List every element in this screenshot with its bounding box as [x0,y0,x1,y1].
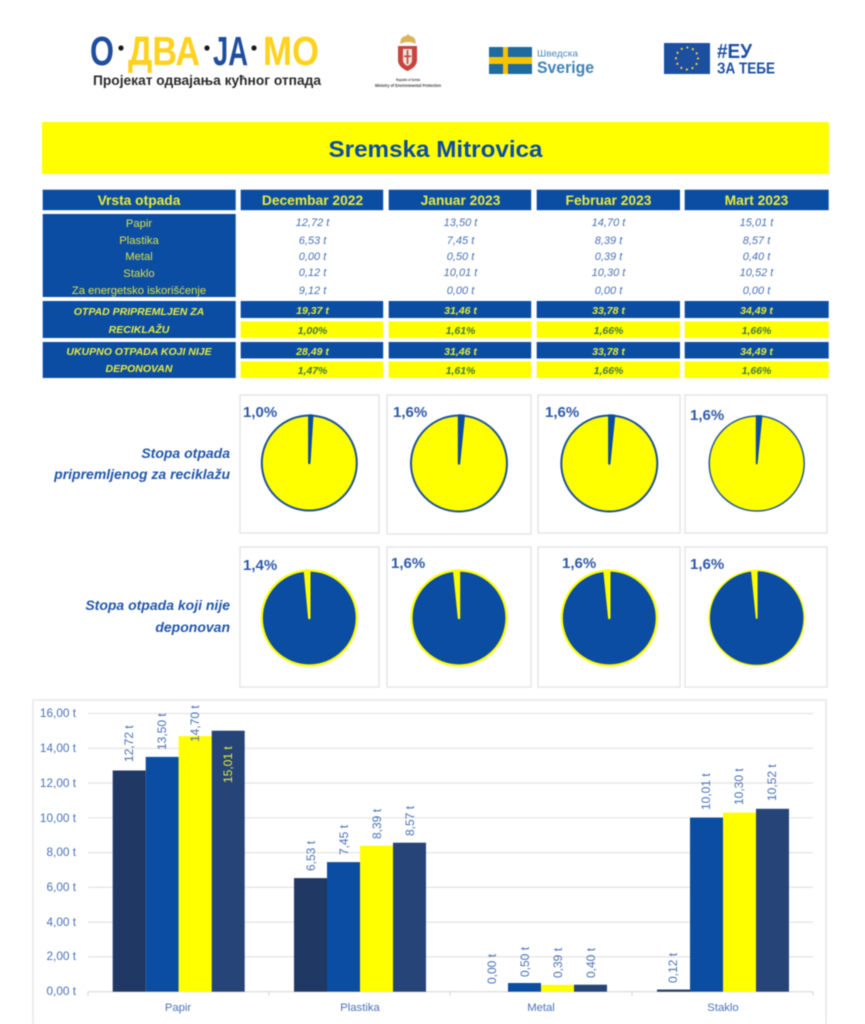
bars: Metal: 0,00 t [485,953,499,984]
table: January values: 0,50 t [447,251,475,263]
table: total non-landfilled waste row: 33,78 t [592,346,625,358]
table: waste type labels: Staklo [123,268,155,280]
pie card: non-landfilled February: 1,6% [562,555,596,572]
pie card: recycling rate March [685,395,827,533]
logo: Odvajamo project: Пројекат одвајања кућног отпада [93,72,321,88]
bars: Papir: 12,72 t [122,725,136,762]
y axis labels: 14,00 t [40,741,77,755]
table: total non-landfilled waste row [43,342,829,378]
table: total non-landfilled waste row: UKUPNO OTPADA KOJI NIJE [66,346,213,358]
y axis labels: 4,00 t [46,915,77,929]
table: total non-landfilled waste row: 1,66% [742,365,772,377]
table: total non-landfilled waste row: 1,66% [594,365,624,377]
table: February values: 8,39 t [595,235,623,247]
bars: Papir: 15,01 t [221,746,235,783]
bars: Metal: 0,40 t [584,947,598,978]
table: February values: 0,00 t [595,285,623,297]
pie card: recycling rate December: 1,0% [243,404,277,421]
table: total non-landfilled waste row: 1,61% [446,365,476,377]
bars: Plastika: 7,45 t [337,824,351,855]
bars: Plastika: 8,57 t [403,805,417,836]
bars: Staklo: 10,30 t [732,768,746,805]
table: February values: 10,30 t [592,267,626,279]
logo: Odvajamo project [90,28,321,88]
logo: EU for you: #ЕУ [717,41,753,63]
bars: Staklo: 10,52 t [765,764,779,801]
category labels: Staklo [707,1002,739,1014]
bars: Metal: 0,39 t [551,947,565,978]
category labels [165,1002,739,1014]
bars: Metal [485,946,607,992]
table: waste prepared for recycling row: RECIKLAŽU [109,323,170,336]
pie card: non-landfilled March [685,547,827,687]
logo: Sweden: Sverige [537,58,594,77]
table: waste prepared for recycling row: 1,66% [742,325,772,337]
logo: Sweden: Шведска [537,48,579,60]
table header: Vrsta otpada [98,193,181,208]
logo: Sweden [489,47,594,77]
table: waste type labels: Plastika [119,235,159,247]
bars: Staklo [657,764,789,992]
table: waste prepared for recycling row: OTPAD PRIPREMLJEN ZA [74,306,204,318]
table: January values: 10,01 t [444,267,478,279]
bars: Staklo: 0,12 t [666,952,680,983]
table: total non-landfilled waste row: 34,49 t [740,346,773,358]
table: January values [444,217,478,297]
table: December values: 12,72 t [296,217,330,229]
bars: Papir: 13,50 t [155,713,169,750]
y axis labels: 0,00 t [46,984,77,998]
table: waste prepared for recycling row: 1,66% [594,325,624,337]
table: waste prepared for recycling row: 34,49 t [740,305,773,317]
bars: Plastika [294,805,426,992]
pie card: non-landfilled December: 1,4% [243,557,277,574]
table: waste prepared for recycling row: 31,46 t [444,305,477,317]
logo: Republic of Serbia crest: Ministry of Environmental Protection [375,83,441,88]
table: March values: 10,52 t [740,267,774,279]
row heading: recycling rate: pripremljenog za reciklažu [53,466,230,482]
table: December values: 6,53 t [299,235,327,247]
y axis labels: 8,00 t [46,845,77,859]
table: waste prepared for recycling row [43,301,829,338]
y axis labels [40,706,77,998]
table: January values: 7,45 t [447,235,475,247]
row heading: recycling rate: Stopa otpada [141,445,230,461]
table header: Mart 2023 [725,193,789,208]
pie card: non-landfilled December [240,547,379,687]
pie card: recycling rate January [387,395,531,534]
row heading: recycling rate [53,445,230,482]
category labels: Metal [527,1002,555,1014]
row heading: non-landfilled rate: Stopa otpada koji nije [85,597,230,613]
table header [43,190,829,210]
table: waste type labels: Metal [125,251,153,263]
bars: Metal: 0,50 t [518,946,532,977]
category labels: Plastika [340,1002,380,1014]
pie card: recycling rate February: 1,6% [545,404,579,421]
pie card: non-landfilled March: 1,6% [690,556,724,573]
table: March values: 0,40 t [743,251,771,263]
table header: Januar 2023 [421,193,501,208]
logo: Odvajamo project: МО [263,28,319,74]
y axis labels: 12,00 t [40,776,77,790]
table: January values: 0,00 t [447,285,475,297]
y axis labels: 10,00 t [40,811,77,825]
pie card: recycling rate March: 1,6% [690,407,724,424]
table header: Februar 2023 [566,193,652,208]
pie card: non-landfilled January: 1,6% [391,555,425,572]
table: January values: 13,50 t [444,217,478,229]
title banner: Sremska Mitrovica [328,136,543,162]
pie card: recycling rate December [240,395,379,533]
bars: Staklo: 10,01 t [699,773,713,810]
row heading: non-landfilled rate: deponovan [155,619,230,635]
bar chart: waste by type and month [33,700,826,1024]
table: waste prepared for recycling row: 1,61% [446,325,476,337]
y axis labels: 2,00 t [46,949,77,963]
pie card: non-landfilled February [538,547,680,687]
row heading: non-landfilled rate [85,597,230,635]
logo: Republic of Serbia crest [375,34,441,88]
logo: Odvajamo project: ЈА [213,28,248,74]
table: total non-landfilled waste row: 28,49 t [295,346,329,358]
bars: Papir [113,705,245,992]
table: December values: 9,12 t [299,285,327,297]
table: waste prepared for recycling row: 19,37 t [296,305,329,317]
logo: Republic of Serbia crest: Republic of Serbia [396,77,421,82]
table: March values: 8,57 t [743,235,771,247]
y axis labels: 6,00 t [46,880,77,894]
table: December values [296,217,330,297]
table: waste prepared for recycling row: 33,78 t [592,305,625,317]
logo: Odvajamo project: О [90,28,114,74]
table header: Decembar 2022 [262,193,363,208]
pie card: non-landfilled January [387,547,531,687]
table: February values [592,217,626,297]
table: March values: 15,01 t [740,217,774,229]
bars: Papir: 14,70 t [188,705,202,742]
table: December values: 0,00 t [299,251,327,263]
bars: Plastika: 8,39 t [370,808,384,839]
table: February values: 0,39 t [595,251,623,263]
table: total non-landfilled waste row: 1,47% [298,365,328,377]
table: March values: 0,00 t [743,285,771,297]
logo: EU for you: ЗА ТЕБЕ [717,60,775,78]
table: waste prepared for recycling row: 1,00% [298,325,328,337]
pie card: recycling rate February [538,395,680,533]
table: December values: 0,12 t [299,267,327,279]
table: February values: 14,70 t [592,217,626,229]
title banner [42,122,829,174]
bars: Plastika: 6,53 t [304,840,318,871]
pie card: recycling rate January: 1,6% [393,404,427,421]
table: waste type labels: Za energetsko iskorišćenje [72,285,206,297]
table: March values [740,217,774,297]
table: total non-landfilled waste row: DEPONOVAN [106,363,173,375]
table: waste type labels: Papir [126,218,152,230]
logo: Odvajamo project: ДВА [128,28,200,74]
table: waste type labels [43,214,236,297]
category labels: Papir [165,1002,191,1014]
table: total non-landfilled waste row: 31,46 t [444,346,477,358]
logo: EU for you [664,41,775,78]
y axis labels: 16,00 t [40,706,77,720]
